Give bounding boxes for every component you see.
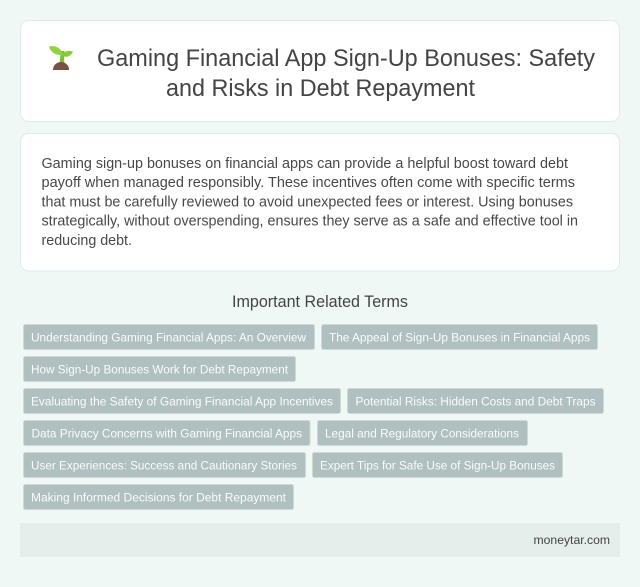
text block: description: reducing debt.: [42, 233, 132, 249]
tag: potential risks: Potential Risks: Hidden Costs and Debt Traps: [356, 394, 596, 408]
title: and Risks in Debt Repayment: [166, 75, 475, 102]
tag: data privacy: Data Privacy Concerns with Gaming Financial Apps: [32, 426, 302, 440]
tag: evaluating safety: [24, 388, 340, 414]
tag: expert tips: [312, 452, 562, 478]
text block: description: payoff when managed responsibly. These incentives often come with specific terms: [42, 175, 575, 191]
tag: user experiences: User Experiences: Success and Cautionary Stories: [31, 458, 297, 472]
text block: description: Gaming sign-up bonuses on financial apps can provide a helpful boost toward debt: [42, 156, 568, 172]
heading: important related terms: Important Related Terms: [232, 293, 408, 311]
tag: appeal of sign-up bonuses: [322, 324, 598, 350]
tag: legal and regulatory: [318, 420, 528, 446]
tag: how sign-up bonuses work: [24, 356, 296, 382]
tag: how sign-up bonuses work: How Sign-Up Bonuses Work for Debt Repayment: [31, 362, 289, 376]
text block: description: that must be carefully reviewed to avoid unexpected fees or interest. Using bonuses: [42, 194, 573, 210]
tag: appeal of sign-up bonuses: The Appeal of Sign-Up Bonuses in Financial Apps: [329, 330, 590, 344]
title: [97, 45, 596, 102]
tag list: [24, 324, 604, 510]
panel: description card: [20, 134, 620, 271]
text block: description: strategically, without overspending, ensures they serve as a safe and effective tool in: [42, 214, 578, 230]
panel: title card: [20, 20, 620, 122]
tag: user experiences: [24, 452, 306, 478]
tag: making informed decisions: [24, 484, 294, 510]
text block: description: [42, 156, 578, 249]
tag: understanding gaming financial apps: Understanding Gaming Financial Apps: An Overview: [31, 330, 306, 344]
tag: data privacy: [24, 420, 310, 446]
title: Gaming Financial App Sign-Up Bonuses: Safety: [97, 45, 596, 72]
tag: expert tips: Expert Tips for Safe Use of Sign-Up Bonuses: [320, 458, 555, 472]
tag: evaluating safety: Evaluating the Safety of Gaming Financial App Incentives: [31, 394, 333, 408]
footer source text: moneytar.com: [534, 533, 610, 547]
icon: sprout: [49, 46, 73, 70]
tag: legal and regulatory: Legal and Regulatory Considerations: [325, 426, 519, 440]
footer bar: [20, 523, 620, 557]
tag: understanding gaming financial apps: [24, 324, 314, 350]
tag: potential risks: [348, 388, 604, 414]
tag: making informed decisions: Making Informed Decisions for Debt Repayment: [31, 490, 287, 504]
